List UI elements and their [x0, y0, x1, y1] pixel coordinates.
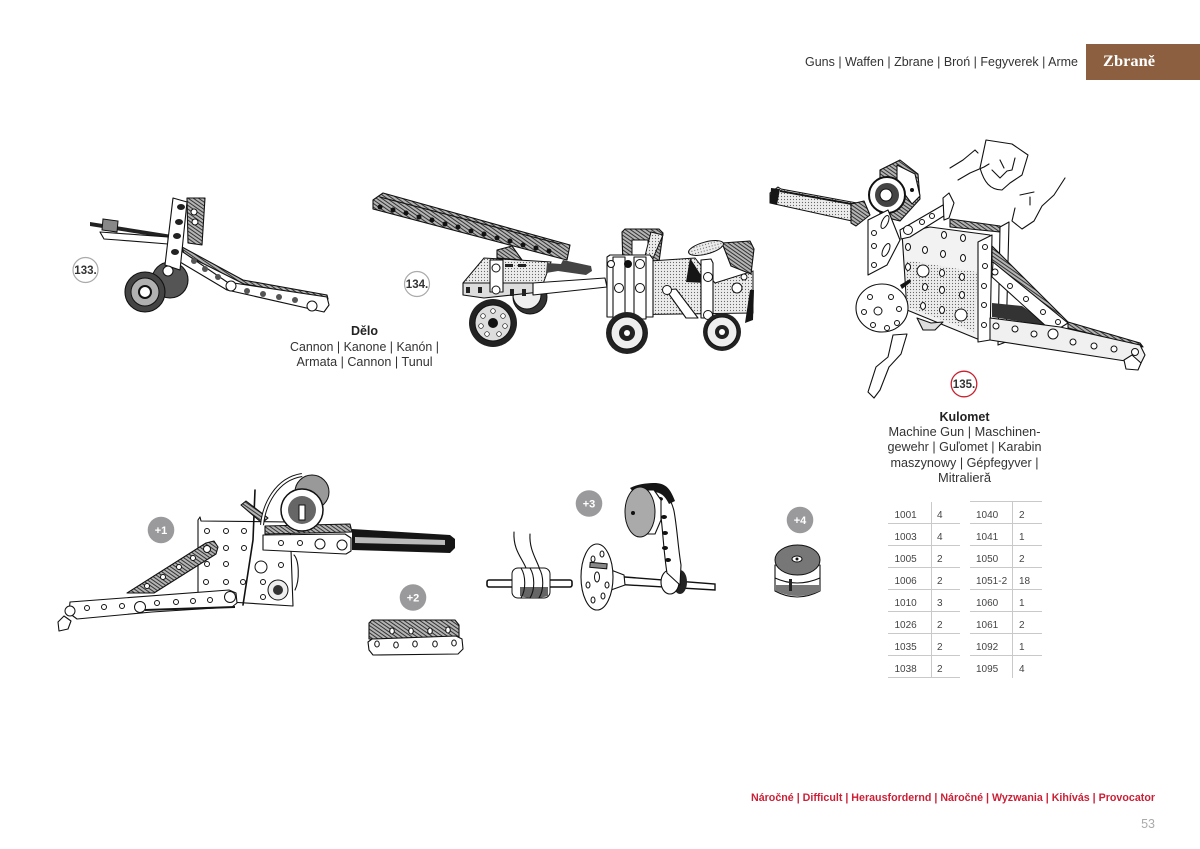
illustration: step 1 assembly — [58, 475, 455, 631]
caption: cannon: Cannon | Kanone | Kanón | — [290, 340, 439, 354]
parts table: 18 — [1019, 576, 1031, 587]
badge +1: +1 — [155, 525, 167, 537]
parts table: 2 — [937, 620, 943, 631]
badge +2: +2 — [407, 592, 419, 604]
parts table: 2 — [937, 576, 943, 587]
parts table: 1 — [1019, 642, 1025, 653]
parts table: 1026 — [894, 620, 917, 631]
number badge 135 — [951, 371, 977, 397]
parts table: 4 — [937, 532, 943, 543]
badge +1 — [148, 517, 174, 543]
parts table: 1005 — [894, 554, 917, 565]
caption: machine gun: Kulomet — [940, 410, 990, 424]
badge +2 — [400, 584, 426, 611]
illustration: model 135 machine gun — [770, 140, 1145, 398]
parts table: 4 — [1019, 664, 1025, 675]
parts table: 1061 — [976, 620, 999, 631]
parts table: 1095 — [976, 664, 999, 675]
header tab — [1086, 44, 1200, 80]
parts table: 1006 — [894, 576, 917, 587]
parts table: 1051-2 — [976, 576, 1008, 587]
parts table: 2 — [1019, 620, 1025, 631]
parts table: 1041 — [976, 532, 999, 543]
parts table: 4 — [937, 510, 943, 521]
header category list: Guns | Waffen | Zbrane | Broń | Fegyverek | Arme — [805, 55, 1078, 69]
parts table: 1040 — [976, 510, 999, 521]
number badge 134: 134. — [406, 279, 428, 291]
badge +4: +4 — [794, 515, 807, 527]
parts table: 1060 — [976, 598, 999, 609]
parts table: 1001 — [894, 510, 917, 521]
badge +4 — [787, 507, 813, 533]
number badge 134 — [404, 272, 430, 296]
illustration: step 2 strip part — [368, 620, 463, 655]
illustration: model 134 cannon with tractor — [373, 193, 754, 354]
page number: 53 — [1141, 817, 1155, 831]
parts table: 2 — [1019, 510, 1025, 521]
parts table: 2 — [937, 554, 943, 565]
number badge 133 — [73, 258, 98, 282]
caption: machine gun: Machine Gun | Maschinen- — [888, 425, 1040, 439]
parts table: 2 — [1019, 554, 1025, 565]
parts table — [888, 502, 1042, 678]
parts table: 1 — [1019, 598, 1025, 609]
illustration: model 133 cannon — [90, 198, 329, 312]
badge +3 — [576, 490, 602, 517]
caption: cannon — [290, 324, 439, 369]
caption: machine gun — [888, 410, 1042, 485]
caption: cannon: Dělo — [351, 324, 378, 338]
illustration: step 4 drum part — [775, 545, 820, 597]
caption: machine gun: gewehr | Guľomet | Karabin — [888, 440, 1042, 454]
caption: machine gun: Mitralieră — [938, 471, 991, 485]
parts table: 1010 — [894, 598, 917, 609]
number badge 133: 133. — [74, 265, 97, 277]
illustration: step 3 axle and pulley parts — [487, 483, 715, 610]
parts table: 1050 — [976, 554, 999, 565]
parts table: 1 — [1019, 532, 1025, 543]
caption: cannon: Armata | Cannon | Tunul — [296, 355, 432, 369]
parts table: 3 — [937, 598, 943, 609]
parts table: 1003 — [894, 532, 917, 543]
badge +3: +3 — [583, 498, 595, 510]
header tab: Zbraně — [1103, 53, 1155, 70]
caption: machine gun: maszynowy | Gépfegyver | — [890, 456, 1038, 470]
parts table: 2 — [937, 642, 943, 653]
parts table: 1092 — [976, 642, 999, 653]
parts table: 1038 — [894, 664, 917, 675]
parts table: 1035 — [894, 642, 917, 653]
number badge 135: 135. — [953, 379, 975, 391]
difficulty label: Náročné | Difficult | Herausfordernd | Náročné | Wyzwania | Kihívás | Provocator — [751, 792, 1156, 804]
parts table: 2 — [937, 664, 943, 675]
